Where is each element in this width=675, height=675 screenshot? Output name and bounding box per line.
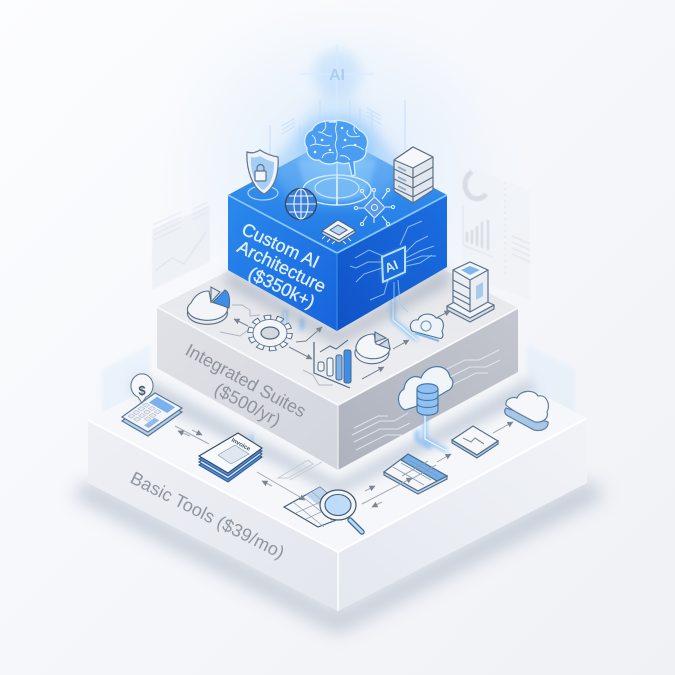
top ai glow: AI [329,67,345,84]
circuit traces on grey right face [352,350,500,450]
icon: table with magnifier [284,487,362,532]
icon: envelope chart [452,426,498,458]
integrated suites label: Integrated Suites [182,340,309,421]
custom ai label: ($350k+) [245,263,318,312]
icon: gear [251,318,289,348]
connectors on bottom tier [175,422,513,507]
icon: small server tower [447,262,494,322]
ground shadow [72,480,606,634]
icon: invoice stack: Invoice [230,438,252,453]
basic tools label: Basic Tools ($39/mo) [127,468,288,563]
light beam [268,72,406,205]
icon: spreadsheet window [384,454,447,494]
light side columns [102,345,575,415]
icon: cloud with gear [410,314,443,341]
custom ai label: Custom AI [239,219,322,272]
tier: basic tools slab [88,290,587,611]
glow traces between tiers [245,290,447,452]
icon: cloud database [398,367,453,415]
shadow of middle slab [130,375,535,495]
top ai glow [300,44,374,140]
icon: globe [286,188,316,220]
icon: circuit node [354,188,395,226]
icon: ai chip with circuit: AI [383,257,400,276]
icon: server stack [394,147,433,203]
icon: pie chart two [355,332,390,364]
icon: cloud flat [505,391,548,431]
icon: cpu chip [322,220,355,244]
icon: bar chart [314,340,351,388]
icon: invoice stack [199,433,262,482]
icon: brain [299,116,375,176]
hologram data lines [270,100,405,165]
icon: calculator [122,393,182,436]
connectors on middle tier [220,305,450,385]
shadow of blue cube [225,267,450,345]
custom ai label [234,219,329,312]
tier: integrated suites slab [157,215,518,470]
tier: custom ai cube [228,136,447,331]
holographic dome and rings [298,160,376,205]
icon: ai chip with circuit [350,221,436,312]
icon: dollar coin: $ [138,383,146,398]
ghost panel: left chart [152,202,210,290]
background glow [147,0,527,340]
custom ai label: Architecture [234,237,329,297]
icon: pie chart one [187,287,230,324]
icon: dollar coin [131,374,153,403]
ghost panel: right charts [462,165,530,300]
icon: shield [247,150,278,200]
integrated suites label: ($500/yr) [211,379,284,430]
